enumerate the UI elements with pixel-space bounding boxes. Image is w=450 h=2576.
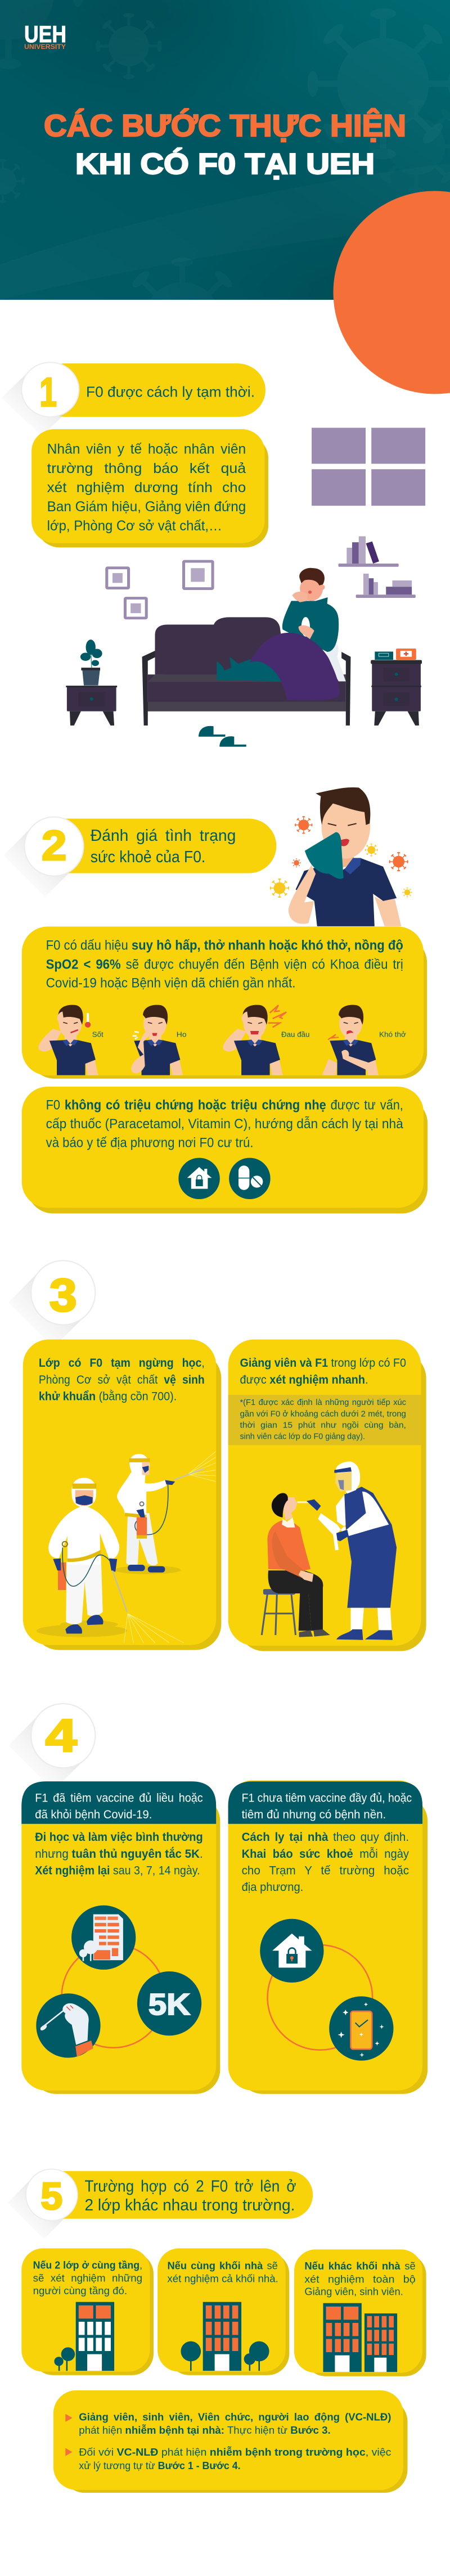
icon: house with lock	[260, 1919, 324, 1983]
step 2 badge	[4, 817, 83, 897]
card: different blocks: Nếu khác khối nhà sẽ	[304, 2260, 416, 2272]
step 1	[2, 362, 425, 747]
illustration: rapid test swab	[262, 1461, 397, 1640]
card: vaccinated F1: Đi học và làm việc bình thường	[35, 1831, 203, 1844]
card: different blocks: xét nghiệm toàn bộ	[304, 2273, 416, 2285]
mild symptoms card: cấp thuốc (Paracetamol, Vitamin C), hướng dẫn cách ly tại nhà	[46, 1116, 403, 1132]
icon: 5K	[137, 1971, 201, 2035]
logo: UEH University: UEH	[24, 21, 66, 47]
step 2 badge: 2	[42, 822, 66, 869]
symptom: headache	[223, 1005, 310, 1075]
card: vaccinated F1: đã khỏi bệnh Covid-19.	[35, 1808, 152, 1821]
card: vaccinated F1: F1 đã tiêm vaccine đủ liều hoặc	[35, 1791, 203, 1804]
staff guidance card	[53, 2390, 407, 2493]
card: same floor: người cùng tầng đó.	[33, 2285, 127, 2296]
step 1 heading pill: F0 được cách ly tạm thời.	[86, 384, 255, 400]
icon: building fully highlighted	[181, 2302, 269, 2371]
picture frames	[107, 561, 213, 618]
symptom: fever	[38, 1005, 104, 1075]
bullet arrow 1	[65, 2414, 73, 2422]
card: same block: xét nghiệm cả khối nhà.	[167, 2273, 278, 2285]
step 1 description card	[32, 429, 268, 547]
step 1 heading pill	[2, 362, 266, 436]
card: class suspended and disinfection	[23, 1340, 221, 1650]
icon: pills	[229, 1158, 271, 1199]
step 5 heading pill: Trường hợp có 2 F0 trở lên ở	[85, 2177, 296, 2195]
diagram: school, 5K, testing	[36, 1906, 201, 2058]
staff guidance card: Đối với VC-NLĐ phát hiện nhiễm bệnh trong trường học , việc	[79, 2446, 391, 2458]
card: class suspended and disinfection: khử khuẩn (bằng cồn 700).	[39, 1390, 177, 1403]
card: not fully vaccinated F1: tiêm đủ nhưng có bệnh nền.	[242, 1808, 386, 1821]
mild symptoms card	[22, 1087, 428, 1214]
step 2	[4, 787, 428, 1214]
bookshelves	[339, 536, 416, 598]
card: not fully vaccinated F1: cho Trạm Y tế trường hoặc	[242, 1865, 409, 1877]
title: KHI CÓ F0 TẠI UEH	[75, 148, 375, 181]
card: vaccinated F1: nhưng tuân thủ nguyên tắc 5K.	[35, 1847, 203, 1861]
footnote: F1 definition	[228, 1395, 421, 1445]
staff guidance card: xử lý tương tự từ Bước 1 - Bước 4.	[79, 2460, 241, 2471]
card: same block: Nếu cùng khối nhà sẽ	[167, 2260, 278, 2272]
orange circle	[333, 191, 450, 394]
step 3 badge	[8, 1260, 95, 1348]
step 1 description card: Nhân viên y tế hoặc nhân viên	[47, 442, 246, 457]
staff guidance card: Giảng viên, sinh viên, Viên chức, người lao động (VC-NLĐ)	[79, 2411, 391, 2422]
icon: home with lock	[178, 1158, 220, 1199]
icon: school building	[71, 1906, 136, 1970]
symptoms card	[22, 926, 427, 1079]
card: same floor	[21, 2248, 154, 2375]
step 5 badge: 5	[40, 2176, 62, 2218]
mild symptoms card: và báo y tế địa phương nơi F0 cư trú.	[46, 1136, 254, 1151]
symptoms card: Covid-19 hoặc Bệnh viện dã chiến gần nhất.	[46, 976, 296, 991]
step 5	[8, 2169, 426, 2493]
icon: hand with test swab	[36, 1993, 101, 2058]
step 3	[8, 1260, 426, 1651]
icon: two buildings highlighted	[323, 2303, 397, 2372]
footnote: F1 definition: *(F1 được xác định là những người tiếp xúc	[240, 1398, 406, 1407]
symptom: breathless: Khó thở	[379, 1030, 406, 1038]
title: CÁC BƯỚC THỰC HIỆN	[44, 108, 406, 143]
step 1 description card: trường thông báo kết quả	[47, 461, 246, 476]
step 4	[8, 1704, 428, 2094]
sneezing man with viruses	[270, 787, 412, 926]
sick person on sofa	[217, 568, 346, 700]
step 2 heading pill	[4, 817, 276, 897]
step 5 heading pill	[8, 2169, 313, 2239]
step 2 heading pill: Đánh giá tình trạng	[91, 827, 236, 845]
card: lecturers and F1 rapid test	[228, 1340, 426, 1651]
footnote: F1 definition: gần với F0 ở khoảng cách dưới 2 mét, trong	[240, 1409, 406, 1418]
card: same floor: Nếu 2 lớp ở cùng tầng,	[33, 2259, 142, 2271]
symptom: cough	[131, 1005, 187, 1075]
bullet arrow 2	[65, 2448, 73, 2456]
step 1 badge: 1	[39, 369, 57, 415]
symptoms card: F0 có dấu hiệu suy hô hấp, thở nhanh hoặc khó thở, nồng độ	[46, 938, 403, 953]
symptoms card: SpO2 < 96% sẽ được chuyển đến Bệnh viện có Khoa điều trị	[46, 957, 403, 972]
card: class suspended and disinfection: Lớp có F0 tạm ngừng học,	[39, 1357, 205, 1370]
card: same block	[158, 2248, 289, 2375]
header background	[0, 0, 450, 300]
card: not fully vaccinated F1: Cách ly tại nhà theo quy định.	[242, 1831, 409, 1844]
step 1 description card: xét nghiệm dương tính cho	[47, 480, 246, 496]
step 1 description card: Ban Giám hiệu, Giảng viên đứng	[47, 499, 246, 515]
icon: phone with checkmark	[329, 1996, 393, 2061]
side table with plant	[66, 640, 117, 726]
card: not fully vaccinated F1: địa phương.	[242, 1881, 303, 1894]
sofa	[142, 617, 350, 726]
step 5 badge	[8, 2169, 78, 2239]
card: vaccinated F1	[21, 1781, 220, 2094]
symptom: headache: Đau đầu	[281, 1030, 310, 1038]
diagram: home isolation and health declaration	[260, 1919, 393, 2061]
card: different blocks: Giảng viên, sinh viên.	[304, 2286, 403, 2298]
step 5 heading pill: 2 lớp khác nhau trong trường.	[85, 2196, 295, 2214]
symptom: cough: Ho	[177, 1030, 187, 1038]
step 3 badge: 3	[50, 1269, 77, 1321]
title	[44, 108, 406, 181]
mild symptoms card: F0 không có triệu chứng hoặc triệu chứng nhẹ được tư vấn,	[46, 1097, 403, 1113]
step 4 badge: 4	[46, 1709, 77, 1762]
logo: UEH University: UNIVERSITY	[24, 43, 66, 51]
icon: 5K: 5K	[148, 1988, 191, 2021]
footnote: F1 definition: thời gian 15 phút như ngồi cùng bàn,	[240, 1421, 406, 1430]
card: not fully vaccinated F1: F1 chưa tiêm vaccine đầy đủ, hoặc	[242, 1791, 412, 1804]
card: class suspended and disinfection: Phòng Cơ sở vật chất vệ sinh	[39, 1373, 205, 1386]
card: not fully vaccinated F1: Khai báo sức khoẻ mỗi ngày	[242, 1848, 410, 1861]
symptom: fever: Sốt	[92, 1030, 104, 1038]
card: vaccinated F1: Xét nghiệm lại sau 3, 7, 14 ngày.	[35, 1865, 200, 1877]
icon: building with highlighted floor	[54, 2302, 114, 2371]
slippers	[199, 726, 246, 747]
step 1 description card: lớp, Phòng Cơ sở vật chất,…	[47, 518, 222, 534]
step 2 heading pill: sức khoẻ của F0.	[91, 848, 205, 866]
step 4 badge	[8, 1704, 95, 1790]
night stand with medicine	[371, 648, 422, 726]
step 1 badge	[2, 362, 79, 436]
card: same floor: sẽ xét nghiệm những	[33, 2272, 142, 2284]
card: not fully vaccinated F1	[228, 1780, 428, 2094]
header banner	[0, 0, 450, 300]
staff guidance card: phát hiện nhiễm bệnh tại nhà: Thực hiện từ Bước 3.	[79, 2424, 331, 2436]
window	[312, 428, 425, 506]
symptom: breathless	[322, 1005, 406, 1075]
card: lecturers and F1 rapid test: Giảng viên và F1 trong lớp có F0	[240, 1357, 406, 1370]
card: different blocks	[294, 2249, 426, 2376]
illustration: disinfection workers	[37, 1452, 216, 1643]
footnote: F1 definition: sinh viên các lớp do F0 giảng dạy).	[240, 1433, 365, 1442]
card: lecturers and F1 rapid test: được xét nghiệm nhanh.	[240, 1373, 368, 1386]
